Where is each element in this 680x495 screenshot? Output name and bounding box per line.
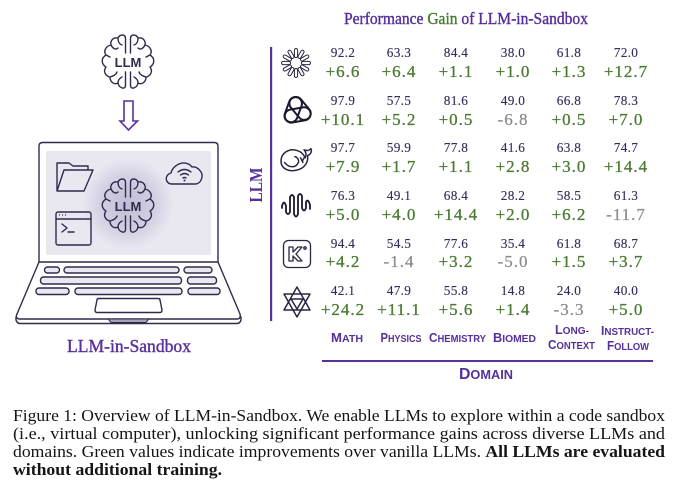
laptop screen (46, 151, 211, 255)
table: row 6: 47.9 (387, 283, 411, 298)
table: row 5: +3.2 (439, 252, 473, 271)
table: row 5: 94.4 (331, 236, 355, 251)
caption: domains. Green values indicate improvements over vanilla LLMs. All LLMs are evaluated (13, 442, 665, 461)
table: row 1: +1.1 (439, 62, 473, 81)
table: row 5 (326, 236, 643, 271)
table: row 6: 40.0 (614, 283, 638, 298)
table: row 3: +2.8 (496, 157, 530, 176)
domain labels: BIOMED (493, 330, 536, 345)
table: row 3: 41.6 (501, 140, 525, 155)
table: row 1: 92.2 (331, 45, 355, 60)
icon: OpenAI-style knot (283, 94, 313, 124)
table: row 2: 57.5 (387, 93, 411, 108)
table: row 3: 77.8 (444, 140, 468, 155)
table: row 5: 35.4 (501, 236, 525, 251)
table: row 2: +0.5 (552, 110, 586, 129)
screen glow (82, 158, 174, 250)
touchpad (95, 298, 162, 312)
table: row 2: +7.0 (609, 110, 643, 129)
chart title: Performance Gain of LLM-in-Sandbox (344, 9, 588, 28)
axis: LLM: LLM (246, 168, 266, 202)
table: row 4: +5.0 (326, 205, 360, 224)
table: row 4: +6.2 (552, 205, 586, 224)
table: row 6: -3.3 (554, 300, 584, 319)
table: row 6: 55.8 (444, 283, 468, 298)
keyboard keys (36, 267, 220, 294)
icon: LLM brain (102, 35, 154, 88)
icon: terminal window (56, 212, 91, 245)
table: row 2: 97.9 (331, 93, 355, 108)
table: row 1 (326, 45, 648, 81)
table: row 2: 66.8 (557, 93, 581, 108)
table: row 2: 78.3 (614, 93, 638, 108)
icon: brain on screen (102, 179, 154, 232)
table: row 1: 84.4 (444, 45, 468, 60)
table: row 4: +2.0 (496, 205, 530, 224)
table: row 6: 24.0 (557, 283, 581, 298)
table: row 4: 76.3 (331, 188, 355, 203)
domain labels: CHEMISTRY (429, 330, 486, 345)
table: row 4: -11.7 (606, 205, 646, 224)
icon: Zhipu-style star (284, 287, 310, 317)
icon: wifi cloud (166, 163, 202, 184)
table: row 1: 63.3 (387, 45, 411, 60)
illustration: laptop (16, 142, 241, 324)
table: row 3: +14.4 (604, 157, 648, 176)
table: row 6: 42.1 (331, 283, 355, 298)
table: row 2: 49.0 (501, 93, 525, 108)
table: row 5: 54.5 (387, 236, 411, 251)
axis: Domain: DOMAIN (459, 366, 513, 383)
table: row 2: +5.2 (382, 110, 416, 129)
table: row 3: 74.7 (614, 140, 638, 155)
table: row 4: +4.0 (382, 205, 416, 224)
domain labels: CONTEXT (548, 337, 596, 352)
table: row 2 (321, 93, 643, 129)
table: row 2: +10.1 (321, 110, 365, 129)
table: row 3: +7.9 (326, 157, 360, 176)
table: row 1: +1.0 (496, 62, 530, 81)
domain labels: MATH (331, 330, 363, 345)
domain labels (331, 322, 654, 353)
domain labels: FOLLOW (607, 338, 649, 353)
table: row 3: 59.9 (387, 140, 411, 155)
table: row 6: +5.6 (439, 300, 473, 319)
table: row 5: 77.6 (444, 236, 468, 251)
table: row 3: 63.8 (557, 140, 581, 155)
table: row 2: -6.8 (498, 110, 528, 129)
table: row 1: +6.4 (382, 62, 416, 81)
icon: folder (57, 163, 93, 191)
caption (13, 406, 666, 479)
table: row 4: +14.4 (434, 205, 478, 224)
table: row 1: +12.7 (604, 62, 648, 81)
arrow: LLM into laptop (120, 101, 138, 130)
table: row 1: 38.0 (501, 45, 525, 60)
table: row 3: +1.1 (439, 157, 473, 176)
table: row 5: +4.2 (326, 252, 360, 271)
table: row 4: 61.3 (614, 188, 638, 203)
table: row 4: 28.2 (501, 188, 525, 203)
table: row 3 (326, 140, 648, 176)
icon: waveform (282, 194, 310, 216)
laptop base (16, 262, 240, 319)
table: row 4: 49.1 (387, 188, 411, 203)
table: row 1: 61.8 (557, 45, 581, 60)
table: row 3: 97.7 (331, 140, 355, 155)
icon: Kimi-style K badge (284, 240, 310, 268)
table: row 5: +1.5 (552, 252, 586, 271)
table: row 1: 72.0 (614, 45, 638, 60)
table: row 5: -5.0 (498, 252, 528, 271)
table: row 5: +3.7 (609, 252, 643, 271)
table: row 1: +1.3 (552, 62, 586, 81)
table: row 5: 61.8 (557, 236, 581, 251)
icon: LLM brain: LLM (115, 55, 141, 70)
domain labels: PHYSICS (380, 330, 422, 345)
icon: Claude-style burst (282, 48, 310, 78)
table: row 6 (321, 283, 643, 319)
domain labels: INSTRUCT- (601, 323, 654, 338)
icon: DeepSeek-style whale (281, 149, 311, 171)
domain labels: LONG- (555, 322, 589, 337)
table: row 3: +1.7 (382, 157, 416, 176)
table: row 4 (326, 188, 646, 224)
table: row 6: 14.8 (501, 283, 525, 298)
caption: (i.e., virtual computer), unlocking significant performance gains across diverse LLMs and (13, 424, 666, 443)
table: row 1: +6.6 (326, 62, 360, 81)
table: row 6: +1.4 (496, 300, 530, 319)
label: LLM-in-Sandbox: LLM-in-Sandbox (67, 336, 191, 356)
table: row 5: -1.4 (384, 252, 414, 271)
laptop lid (39, 142, 218, 262)
table: row 2: 81.6 (444, 93, 468, 108)
table: row 2: +0.5 (439, 110, 473, 129)
table: row 4: 58.5 (557, 188, 581, 203)
table: row 3: +3.0 (552, 157, 586, 176)
caption: without additional training. (13, 460, 222, 479)
table: row 6: +5.0 (609, 300, 643, 319)
table: row 5: 68.7 (614, 236, 638, 251)
table: row 6: +24.2 (321, 300, 365, 319)
table: row 4: 68.4 (444, 188, 468, 203)
caption: Figure 1: Overview of LLM-in-Sandbox. We enable LLMs to explore within a code sandbox (13, 406, 666, 425)
table: row 6: +11.1 (377, 300, 421, 319)
icon: brain on screen: LLM (115, 199, 141, 214)
